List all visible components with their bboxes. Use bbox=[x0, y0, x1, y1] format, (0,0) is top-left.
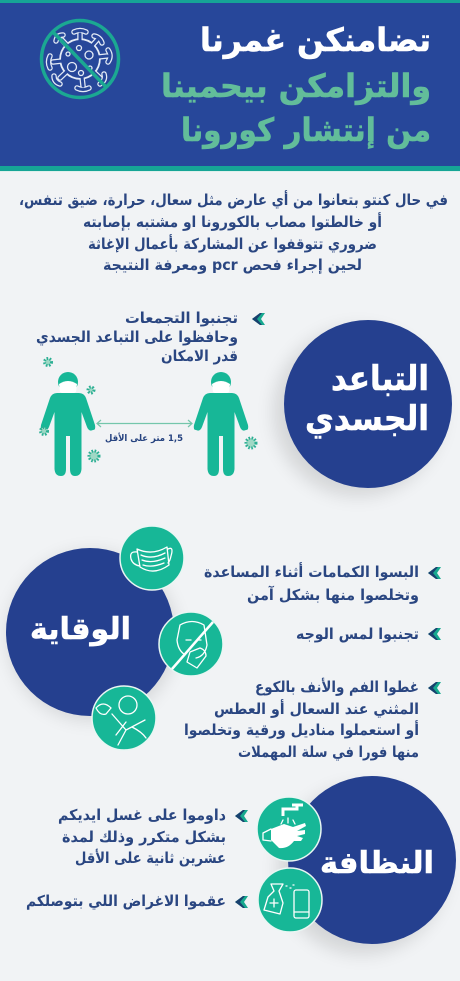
title line 2: والتزامكن بيحمينا bbox=[161, 67, 431, 105]
icon: coughing into elbow bbox=[92, 686, 156, 750]
icon: virus particles bbox=[40, 358, 256, 461]
distancing advice text: تجنبوا التجمعات bbox=[125, 309, 238, 327]
icon: bullet chevron bbox=[235, 896, 248, 908]
circle: prevention heading bbox=[6, 548, 174, 716]
heading: hygiene: النظافة bbox=[320, 846, 434, 881]
advice: do not touch face: تجنبوا لمس الوجه bbox=[296, 625, 419, 643]
advice: wear masks: البسوا الكمامات أثناء المساعدة bbox=[204, 562, 419, 581]
intro paragraph bbox=[19, 190, 448, 274]
circle shadow bbox=[278, 786, 446, 954]
advice: cover mouth and nose: منها فورا في سلة المهملات bbox=[238, 743, 419, 761]
advice: wash hands: بشكل متكرر وذلك لمدة bbox=[62, 828, 226, 846]
distancing advice text bbox=[36, 309, 238, 365]
heading: distancing bbox=[305, 359, 429, 439]
icon: person right bbox=[194, 372, 248, 476]
advice: wear masks bbox=[204, 562, 419, 604]
title line 3: من إنتشار كورونا bbox=[181, 111, 431, 150]
intro paragraph: ضروري تتوقفوا عن المشاركة بأعمال الإغاثة bbox=[88, 234, 377, 254]
circle: distancing heading bbox=[284, 320, 452, 488]
icon: person left bbox=[41, 372, 95, 476]
icon: bullet chevron bbox=[235, 810, 248, 822]
advice: cover mouth and nose: أو استعملوا مناديل ورقية وتخلصوا bbox=[184, 720, 419, 739]
advice: cover mouth and nose bbox=[184, 678, 419, 761]
panel: hygiene bbox=[26, 776, 456, 954]
icon: face mask bbox=[120, 526, 184, 590]
circle: hygiene heading bbox=[288, 776, 456, 944]
icon: do not touch face bbox=[159, 612, 223, 676]
advice: wash hands bbox=[58, 806, 226, 867]
panel: physical distancing bbox=[36, 309, 452, 496]
icon: bullet chevron bbox=[428, 567, 441, 579]
advice: cover mouth and nose: غطوا الفم والأنف بالكوع bbox=[255, 678, 419, 696]
icon: crossed-out virus bbox=[42, 20, 118, 98]
advice: wear masks: وتخلصوا منها بشكل آمن bbox=[247, 586, 419, 604]
circle shadow bbox=[8, 552, 176, 720]
icon: sanitizer and phone bbox=[258, 868, 322, 932]
distancing advice text: قدر الامكان bbox=[161, 347, 238, 365]
icon: bullet chevron bbox=[252, 313, 265, 325]
distance label: 1,5 متر على الأقل bbox=[105, 432, 183, 444]
heading: distancing: التباعد bbox=[331, 359, 429, 399]
distancing advice text: وحافظوا على التباعد الجسدي bbox=[36, 328, 238, 347]
icon: hand washing bbox=[257, 797, 321, 861]
distance arrow bbox=[97, 420, 192, 427]
icon: bullet chevron bbox=[428, 628, 441, 640]
intro paragraph: أو خالطتوا مصاب بالكورونا او مشتبه بإصابته bbox=[83, 212, 382, 231]
heading: prevention: الوقاية bbox=[30, 612, 131, 647]
advice: disinfect deliveries: عقموا الاغراض اللي بتوصلكم bbox=[26, 892, 226, 910]
intro paragraph: لحين إجراء فحص pcr ومعرفة النتيجة bbox=[103, 256, 362, 274]
advice: cover mouth and nose: المثني عند السعال أو العطس bbox=[214, 699, 419, 718]
advice: wash hands: عشرين ثانية على الأقل bbox=[75, 849, 226, 867]
circle shadow bbox=[274, 328, 442, 496]
panel: prevention bbox=[6, 526, 441, 761]
title line 1: تضامنكن غمرنا bbox=[200, 21, 431, 59]
heading: distancing: الجسدي bbox=[305, 399, 429, 439]
advice: wash hands: داوموا على غسل ايديكم bbox=[58, 806, 226, 824]
header banner bbox=[0, 0, 460, 172]
icon: bullet chevron bbox=[428, 682, 441, 694]
